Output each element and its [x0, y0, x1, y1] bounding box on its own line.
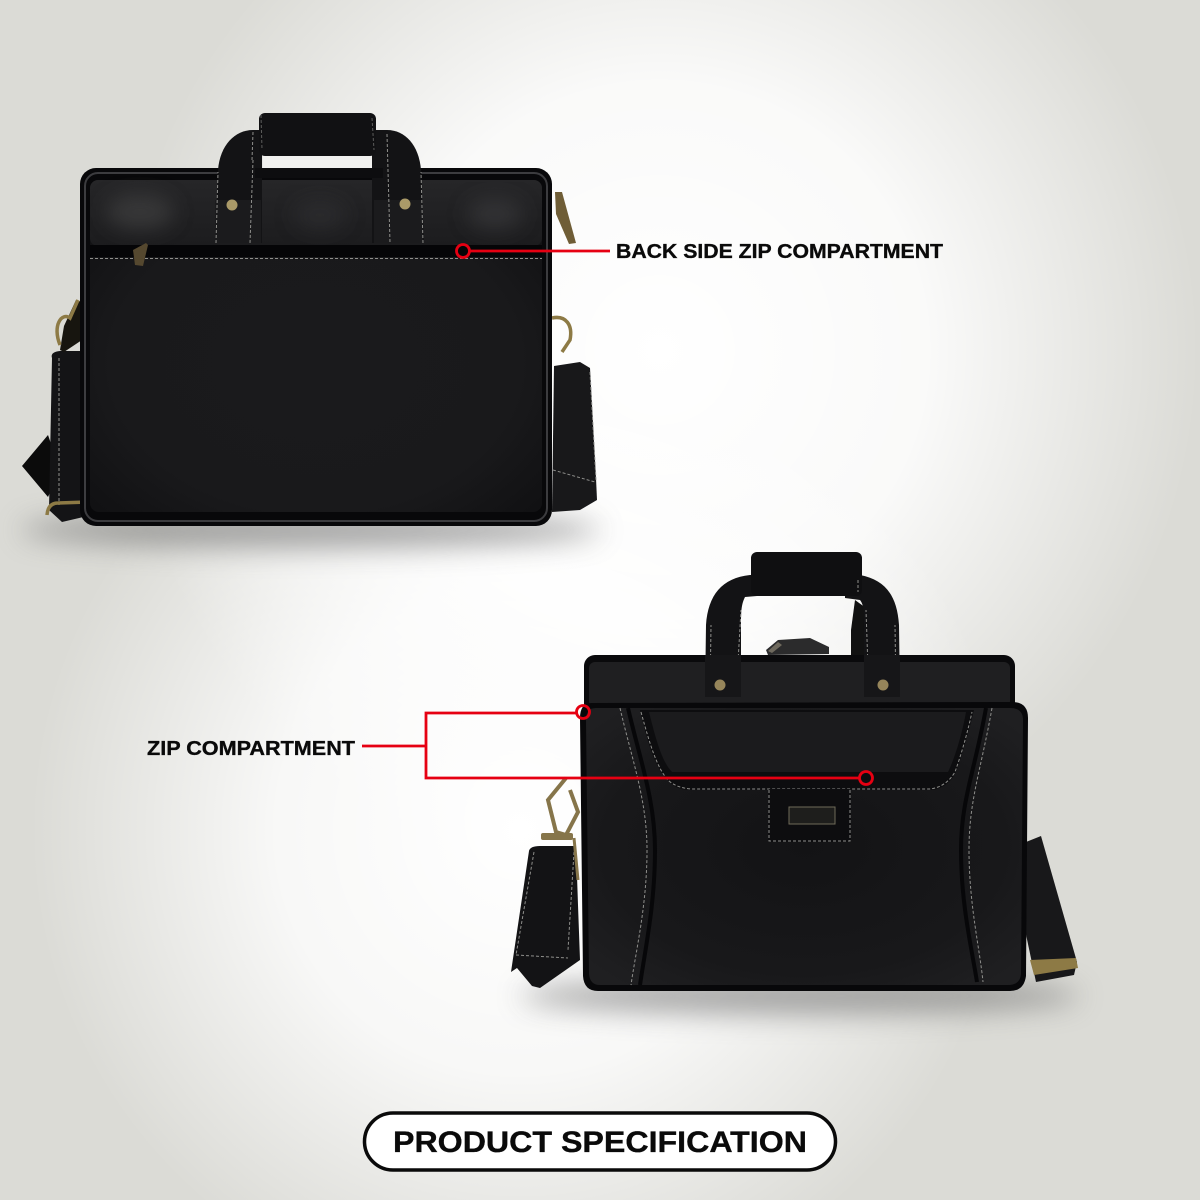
callout label: front: ZIP COMPARTMENT — [147, 738, 355, 760]
flap — [640, 710, 974, 790]
main body — [80, 168, 552, 526]
rivets — [714, 680, 726, 690]
zip pullers — [766, 638, 829, 655]
product specification badge — [364, 1113, 836, 1170]
handle rivets — [226, 200, 238, 210]
product photo: front of briefcase — [511, 552, 1080, 1014]
side zip puller — [555, 192, 576, 244]
front pocket — [580, 702, 1028, 991]
upper body — [584, 655, 1015, 725]
callout label: back side: BACK SIDE ZIP COMPARTMENT — [616, 241, 943, 263]
callout: back side zip compartment — [456, 241, 943, 263]
handle — [705, 552, 900, 697]
badge label: PRODUCT SPECIFICATION — [393, 1126, 807, 1159]
callout: zip compartment — [147, 706, 872, 784]
zip pocket — [90, 245, 542, 257]
upper panel — [90, 180, 542, 246]
handles — [215, 113, 424, 243]
logo patch — [768, 789, 851, 842]
curved seams — [628, 708, 655, 985]
product photo: back of briefcase — [20, 113, 600, 548]
right shoulder strap — [1024, 836, 1078, 982]
left shoulder strap — [22, 300, 92, 522]
left shoulder strap — [511, 778, 580, 988]
right shoulder strap — [552, 317, 597, 512]
